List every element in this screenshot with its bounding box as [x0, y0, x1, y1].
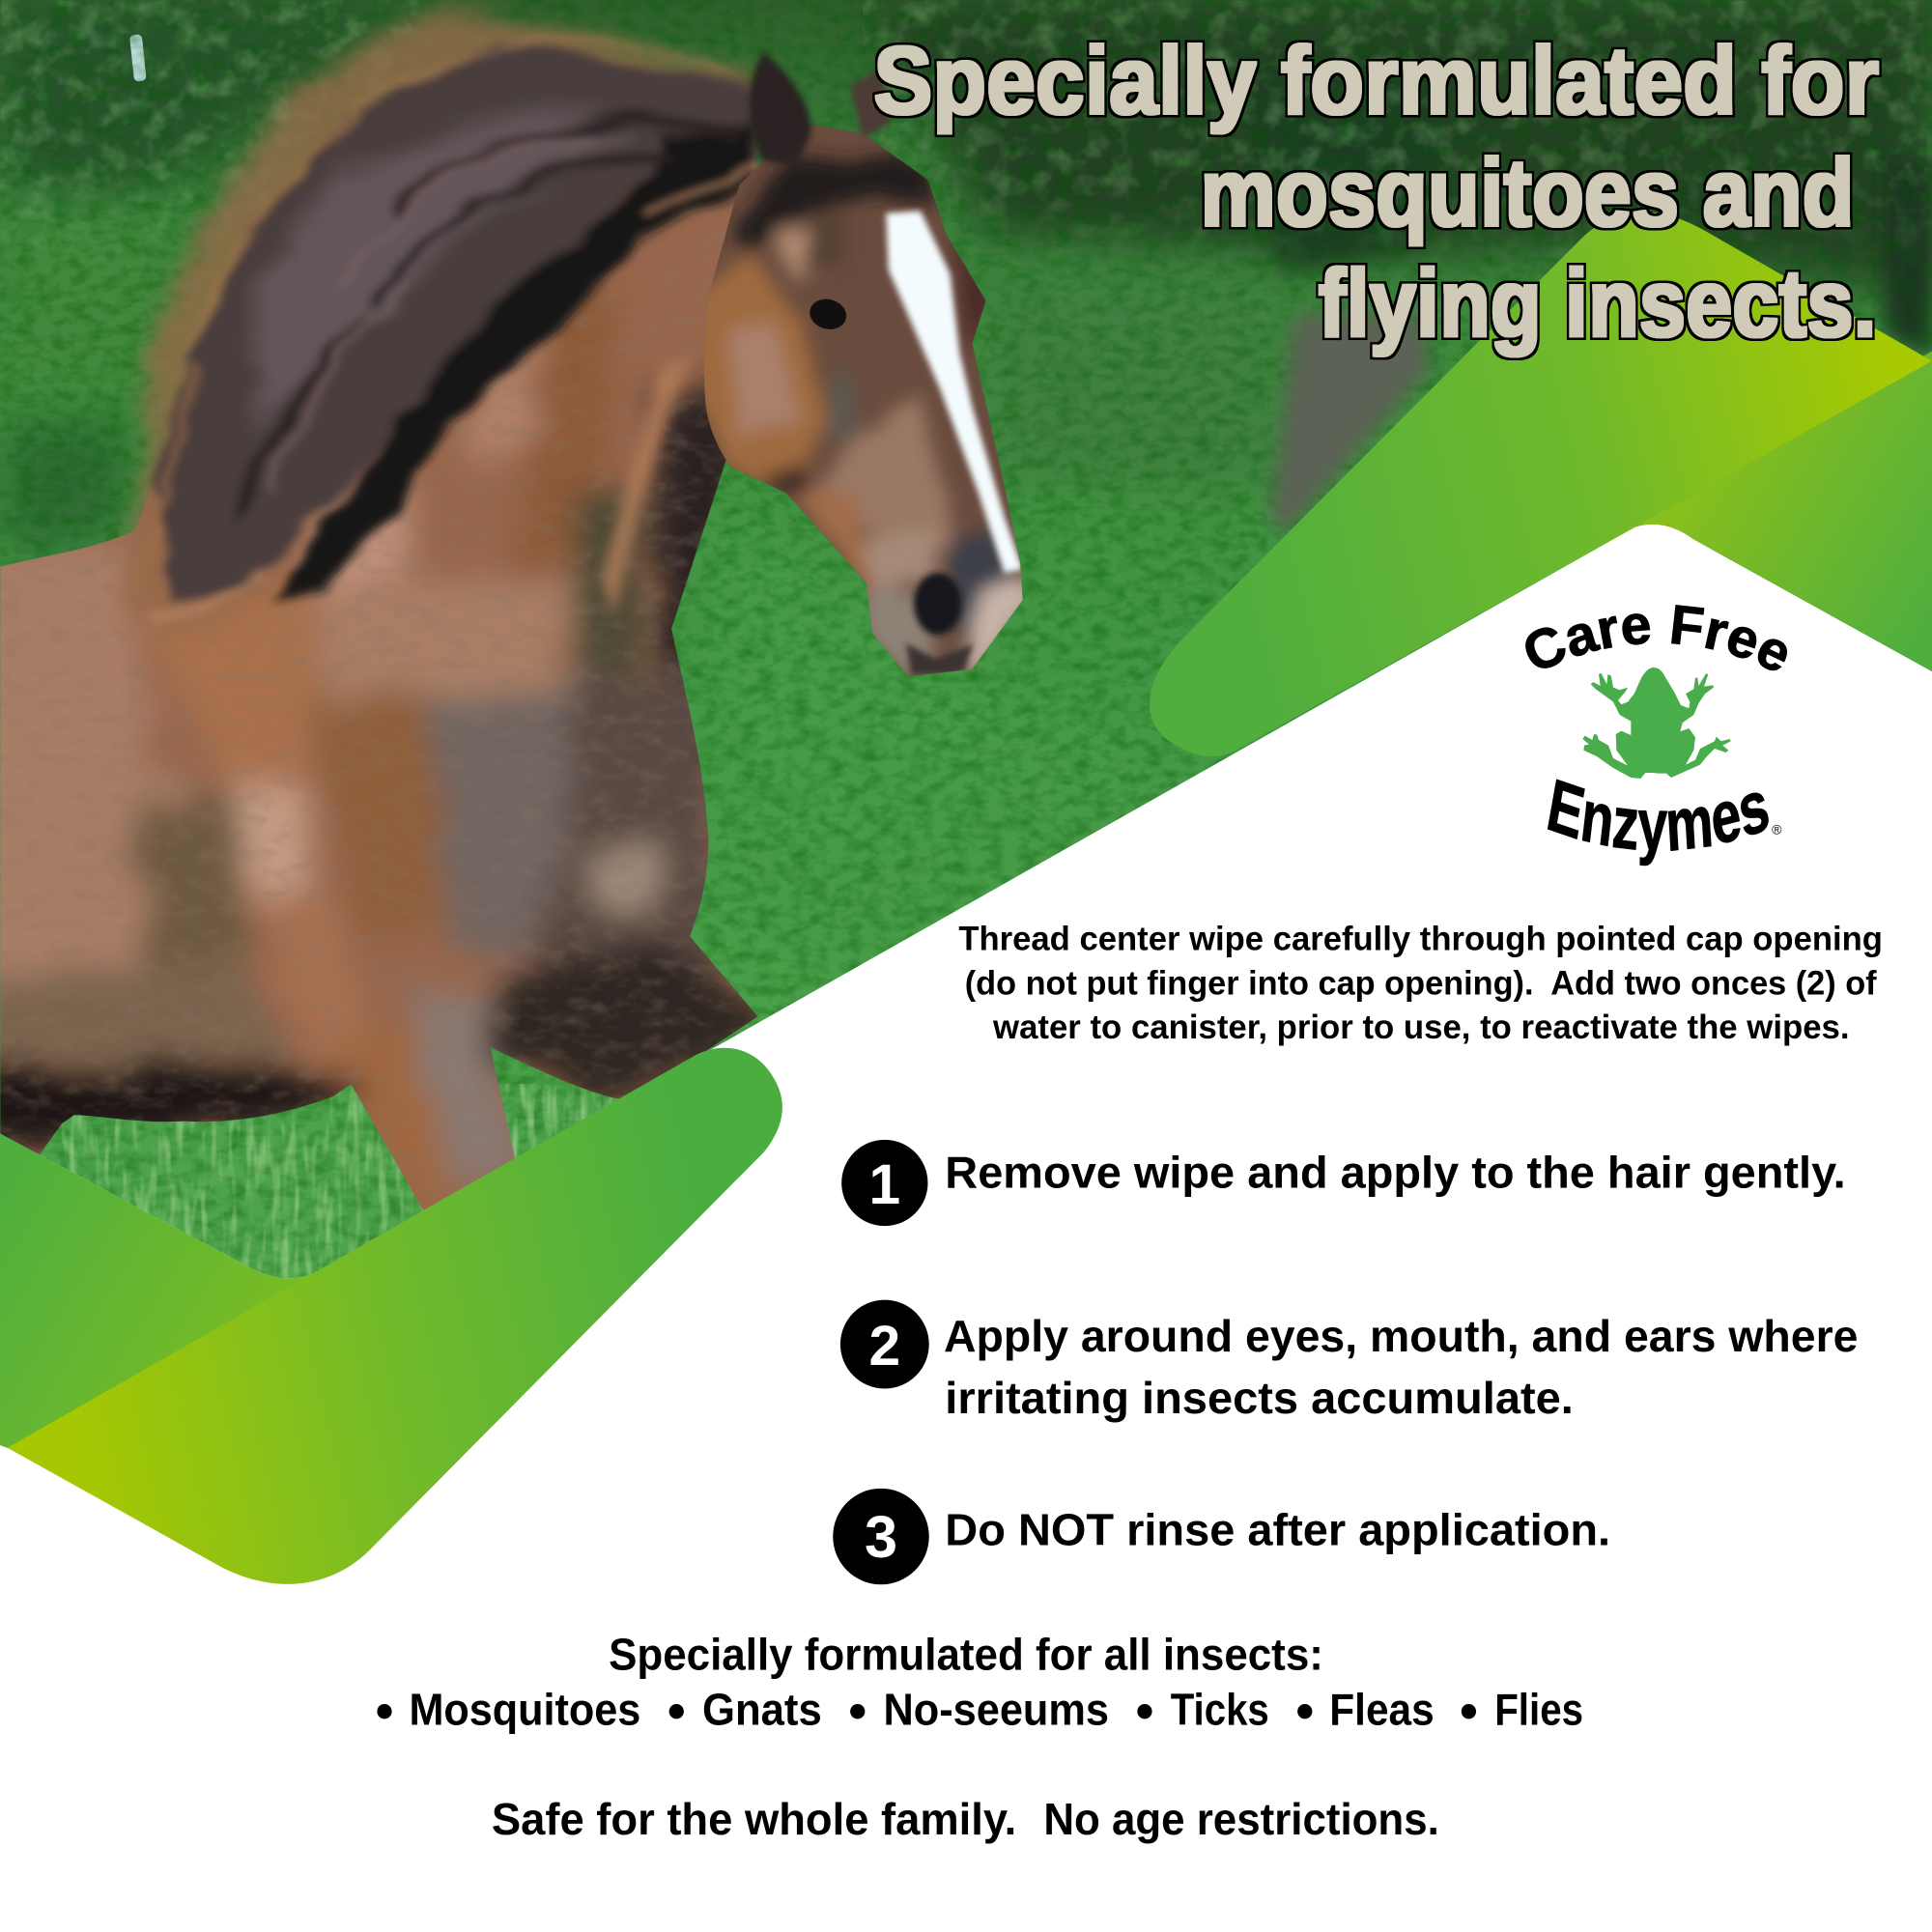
- step 2 number: 2: [869, 1315, 900, 1378]
- instructions paragraph: Thread center wipe carefully through pointed cap opening: [958, 920, 1883, 957]
- mane black core: [271, 129, 761, 604]
- step 2 text: irritating insects accumulate.: [945, 1373, 1574, 1423]
- nostril: [914, 573, 961, 635]
- registered mark: ®: [1772, 822, 1782, 838]
- horse body: [0, 145, 757, 1210]
- lower green swoosh: [8, 1048, 782, 1584]
- step 1 text: Remove wipe and apply to the hair gently.: [945, 1148, 1846, 1198]
- mane streaks: [135, 40, 764, 622]
- insect list: [377, 1685, 1583, 1735]
- logo wordmark: Enzymes: [1548, 779, 1769, 866]
- eye: [807, 296, 850, 333]
- insect list: Fleas: [1329, 1685, 1435, 1735]
- far ear: [850, 68, 890, 138]
- tree trunk: [1271, 314, 1430, 536]
- safety statement: No age restrictions.: [1043, 1794, 1439, 1844]
- step 3 number: 3: [865, 1504, 897, 1570]
- instructions paragraph: water to canister, prior to use, to reactivate the wipes.: [992, 1009, 1850, 1046]
- headline: [873, 27, 1879, 357]
- instructions paragraph: [958, 920, 1883, 1046]
- foliage texture: [0, 0, 1932, 1278]
- horse head: [690, 111, 1047, 690]
- background foliage and trees: [0, 0, 1932, 961]
- step 2 text: [944, 1311, 1858, 1423]
- neck highlight: [601, 357, 690, 616]
- mane highlight: [252, 104, 640, 431]
- safety statement: Safe for the whole family.: [492, 1794, 1016, 1844]
- insect list: No-seeums: [884, 1685, 1109, 1735]
- headline: mosquitoes and: [1200, 139, 1855, 246]
- insect list: Flies: [1494, 1685, 1583, 1735]
- logo text arc: Care Free: [1525, 605, 1787, 670]
- insect list: Gnats: [702, 1685, 822, 1735]
- safety statement: [492, 1794, 1439, 1844]
- step 1: [841, 1140, 1846, 1226]
- insect list heading: Specially formulated for all insects:: [609, 1629, 1323, 1679]
- leaf highlights: [0, 0, 1932, 254]
- step 3 badge: [833, 1489, 929, 1584]
- icon: green frog: [1582, 668, 1731, 779]
- photo: horse running in a green field: [0, 0, 1932, 1279]
- mane body: [154, 43, 761, 604]
- horse mane: [124, 6, 764, 640]
- right green wedge: [1627, 352, 1932, 678]
- step 2: [840, 1300, 1858, 1423]
- step 2 badge: [840, 1300, 929, 1389]
- coat texture: [0, 313, 742, 1142]
- step 2 text: Apply around eyes, mouth, and ears where: [944, 1311, 1858, 1361]
- step 3: [833, 1489, 1610, 1584]
- mouth shadow: [906, 643, 974, 675]
- step 3 text: Do NOT rinse after application.: [945, 1504, 1610, 1554]
- step 1 number: 1: [869, 1153, 900, 1216]
- meadow background: [0, 0, 1932, 1279]
- upper green swoosh: [1150, 212, 1932, 756]
- logo: Care Free Enzymes: [1525, 605, 1787, 866]
- instructions paragraph: (do not put finger into cap opening). Add two onces (2) of: [965, 964, 1877, 1002]
- insect list: Mosquitoes: [409, 1685, 640, 1735]
- white blaze: [886, 211, 1023, 573]
- step 1 badge: [841, 1140, 927, 1226]
- horse ear: [750, 52, 810, 166]
- grass blades: [53, 1084, 618, 1278]
- left green wedge: [0, 1133, 370, 1457]
- mane fringe: [124, 6, 752, 640]
- insect list: Ticks: [1171, 1685, 1269, 1735]
